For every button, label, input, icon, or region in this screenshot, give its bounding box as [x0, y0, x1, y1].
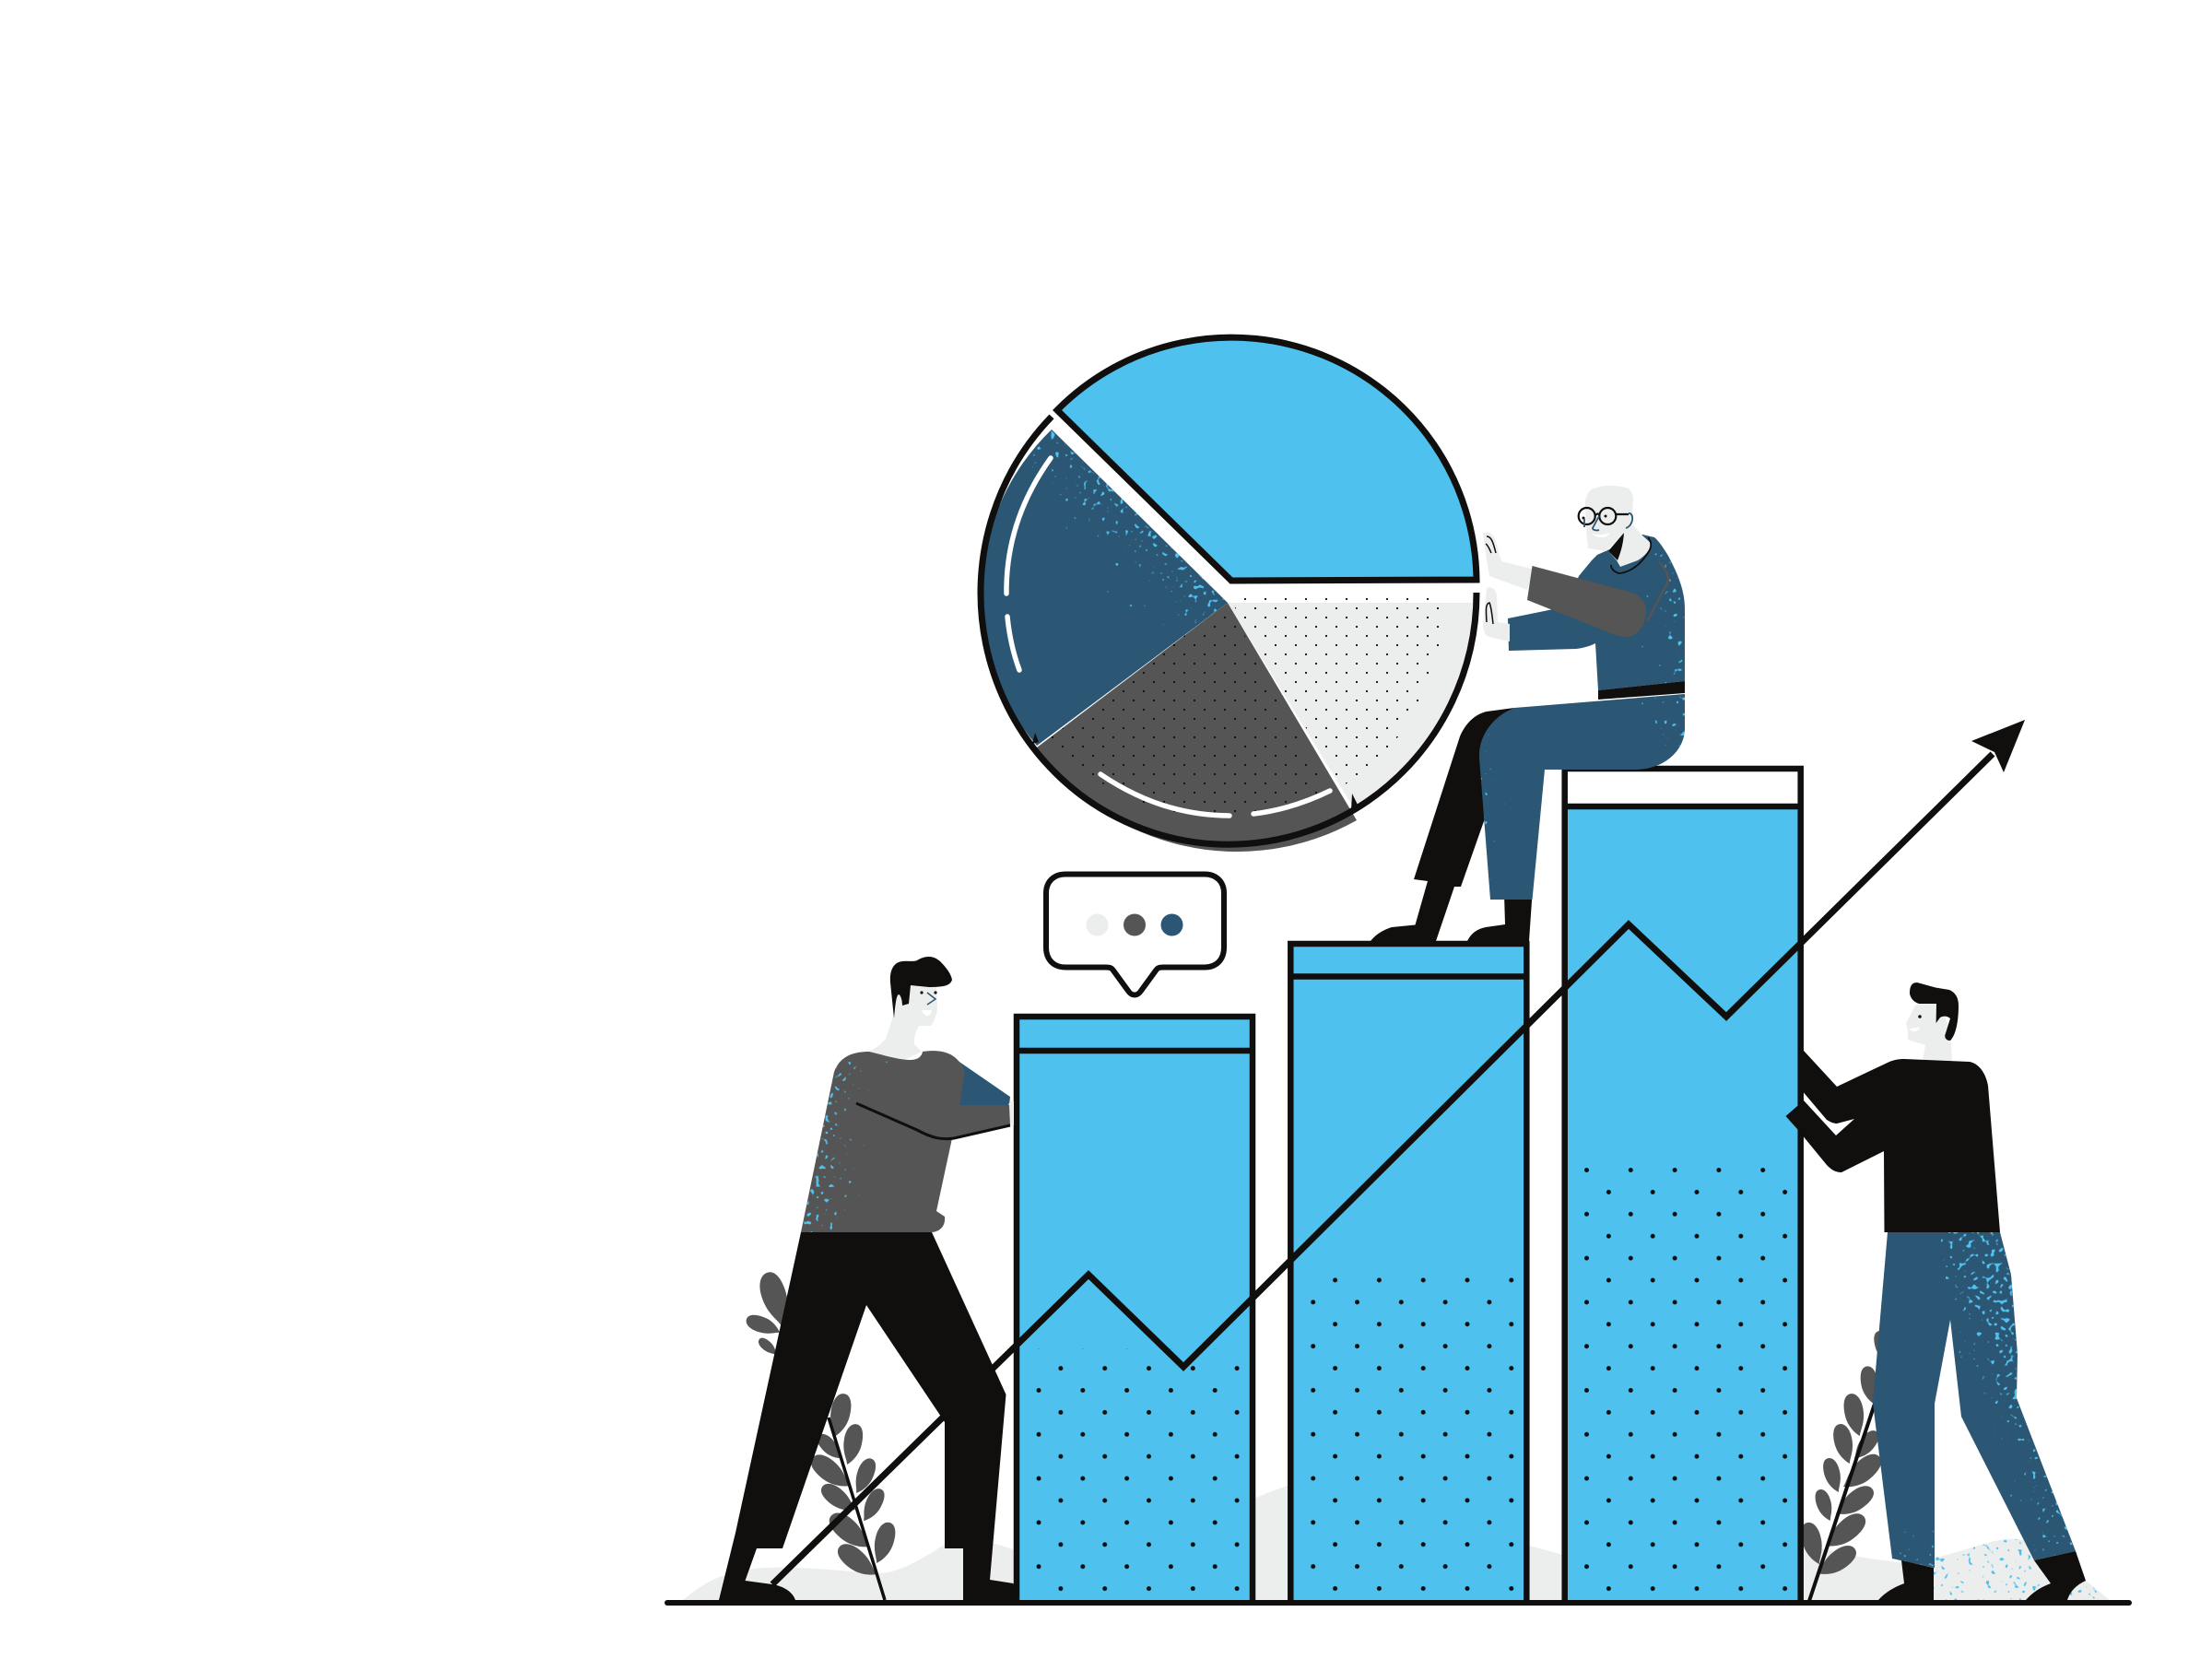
eye: [1918, 1015, 1922, 1018]
front shoe: [1467, 894, 1532, 941]
right shoe: [2026, 1551, 2086, 1600]
left shoe: [1878, 1560, 1934, 1600]
bubble dot: grey: [1124, 914, 1146, 936]
bar: left: [1017, 1017, 1253, 1603]
shirt and arms: [1786, 1051, 2000, 1232]
plant: lower left: [806, 1391, 900, 1600]
trend line with arrow: [772, 720, 2025, 1584]
bubble dot: navy: [1161, 914, 1183, 936]
white highlight dashes: [1006, 458, 1330, 816]
pie outer arc: [981, 417, 1477, 844]
torso: [1508, 535, 1685, 690]
slice: light: [1228, 603, 1473, 808]
slice: blue: [1057, 337, 1477, 581]
bar: right: [1565, 769, 1801, 1603]
hands: [1483, 533, 1535, 590]
slice: grey: [1037, 603, 1357, 852]
speckle on pants: [1479, 694, 1685, 900]
blue sleeve: [954, 1058, 1010, 1105]
sweater: [801, 1051, 1010, 1232]
sleeve: [1527, 566, 1646, 637]
plant: upper left behind man: [744, 1270, 793, 1359]
person: man on the right: [1786, 982, 2086, 1600]
speckle on left leg hem: [1885, 1484, 1935, 1568]
neck and head: [1608, 525, 1652, 567]
person: older man sitting: [1371, 486, 1685, 941]
speech bubble: [1046, 874, 1224, 995]
plant: right: [1796, 1328, 1898, 1601]
elbow line: [1647, 562, 1668, 621]
mouth: [1910, 1027, 1920, 1031]
hair: [890, 957, 952, 1018]
back leg and shoe: [1371, 708, 1514, 941]
arrow head: [1971, 720, 2025, 772]
background hills: [682, 1484, 2111, 1601]
pants: [719, 1232, 1018, 1600]
glasses: [1579, 508, 1629, 524]
slice: navy: [982, 429, 1228, 746]
person: man on the left: [719, 957, 1018, 1600]
neck and head: [869, 985, 937, 1060]
speckle on right hill: [1934, 1539, 2111, 1601]
pants: [1479, 694, 1685, 900]
speckle on navy slice: [982, 429, 1228, 746]
bar: middle: [1290, 944, 1526, 1603]
neck and head: [1906, 1000, 1952, 1061]
belt: [1598, 681, 1685, 700]
speckle on sweater: [801, 1052, 923, 1232]
ground line: [667, 1600, 2129, 1606]
arm line: [856, 1103, 1010, 1139]
pie chart: [981, 337, 1477, 852]
speckle on knee: [1479, 708, 1532, 900]
dot texture on lower slices: [1228, 595, 1444, 787]
hand: [1007, 1101, 1014, 1125]
speckle on torso: [1597, 535, 1685, 690]
bubble dot: light: [1086, 914, 1108, 936]
hair: [1910, 982, 1959, 1041]
speckle on right leg: [1940, 1232, 2076, 1560]
face details: [920, 991, 924, 994]
pants: [1873, 1232, 2076, 1568]
